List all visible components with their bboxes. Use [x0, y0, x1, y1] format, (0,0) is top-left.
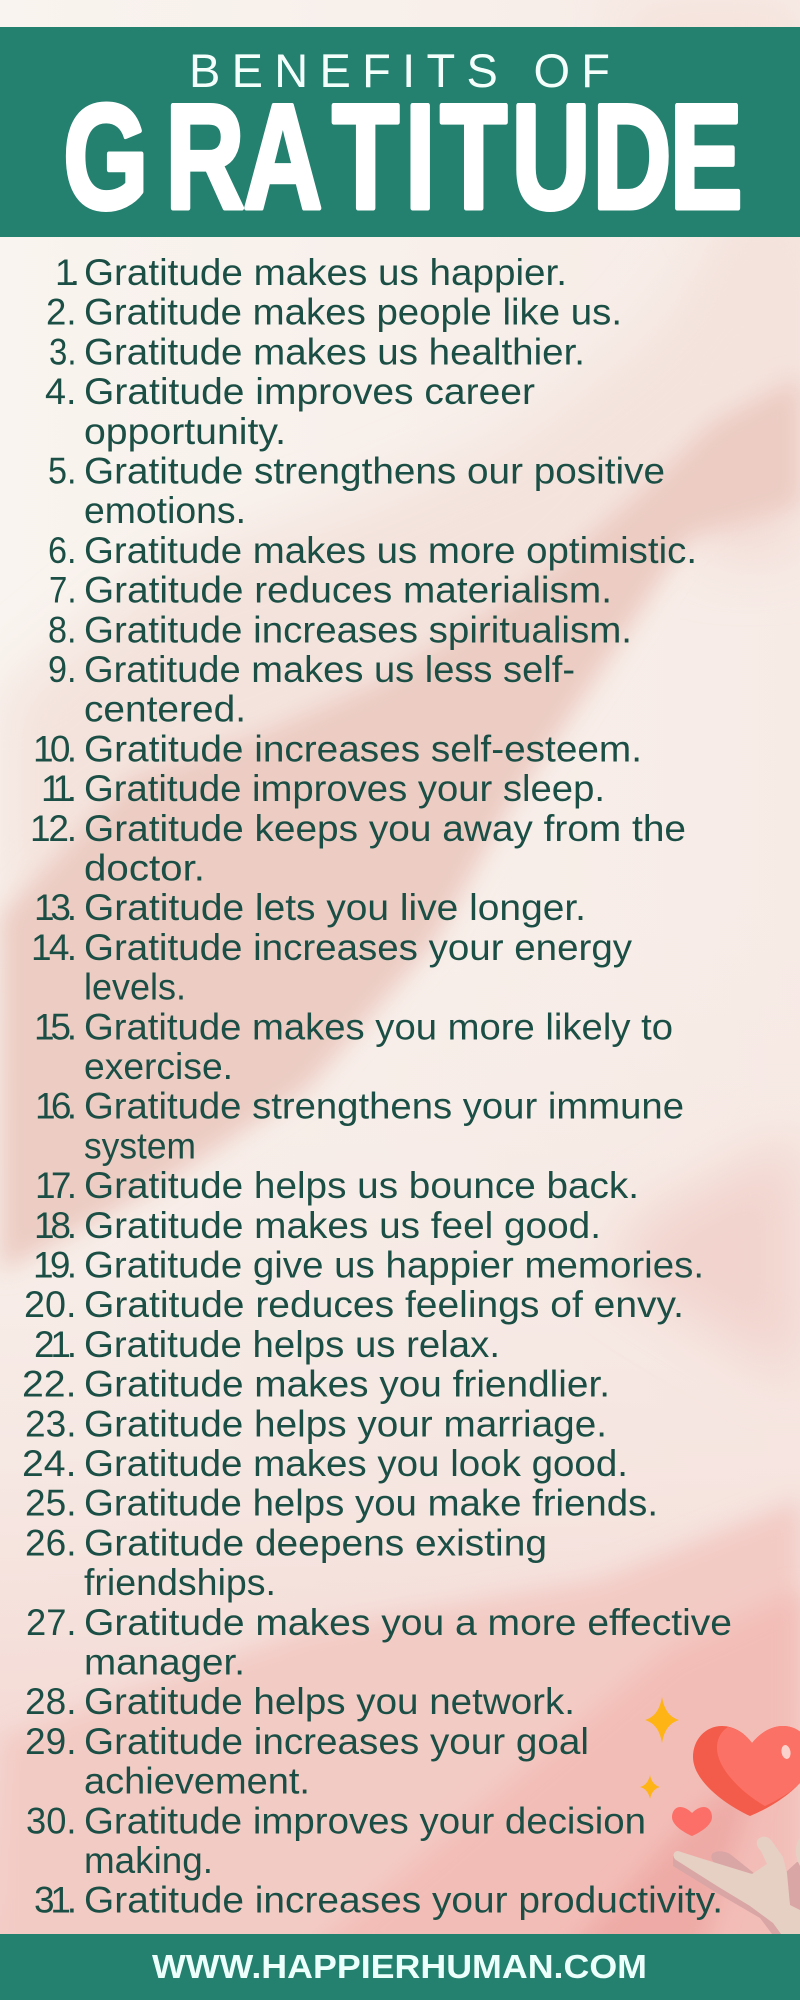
item 19: Gratitude give us happier memories.	[84, 1244, 704, 1286]
item 25: Gratitude helps you make friends.	[84, 1483, 658, 1524]
item 6: 6.	[48, 530, 76, 571]
item 6: Gratitude makes us more optimistic.	[84, 530, 697, 571]
item 26	[25, 1522, 547, 1603]
item 11: Gratitude improves your sleep.	[84, 768, 605, 809]
item 9: Gratitude makes us less self-	[84, 649, 575, 690]
heading: benefits of: BENEFITS OF	[189, 44, 610, 97]
icon: small heart	[672, 1807, 712, 1836]
item 20: Gratitude reduces feelings of envy.	[84, 1284, 684, 1325]
item 5: 5.	[48, 450, 76, 492]
item 27	[26, 1602, 732, 1682]
item 1: 1.	[55, 252, 80, 293]
item 27: manager.	[84, 1642, 245, 1682]
item 16: Gratitude strengthens your immune	[84, 1086, 684, 1127]
item 5: Gratitude strengthens our positive	[84, 450, 665, 492]
item 12: Gratitude keeps you away from the	[84, 808, 686, 849]
item 29	[25, 1721, 589, 1802]
item 3: 3.	[49, 331, 76, 372]
item 23: 23.	[25, 1403, 76, 1444]
item 2: 2.	[46, 292, 76, 333]
item 14: 14.	[31, 927, 77, 968]
footer banner	[0, 1934, 800, 2000]
item 10: Gratitude increases self-esteem.	[84, 728, 642, 769]
item 9	[48, 649, 575, 730]
item 15: 15.	[34, 1006, 77, 1047]
item 4: opportunity.	[84, 411, 286, 452]
item 28: Gratitude helps you network.	[84, 1681, 575, 1722]
item 12: 12.	[30, 808, 77, 849]
item 14: levels.	[84, 967, 186, 1008]
item 9: centered.	[84, 689, 246, 730]
item 7: 7.	[49, 570, 76, 611]
item 29: achievement.	[84, 1761, 310, 1802]
item 16: 16.	[35, 1086, 77, 1127]
item 3: Gratitude makes us healthier.	[84, 331, 585, 372]
item 24: 24.	[22, 1443, 76, 1484]
item 9: 9.	[48, 649, 76, 690]
footer url: WWW.HAPPIERHUMAN.COM	[152, 1948, 647, 1985]
item 30: making.	[84, 1840, 213, 1881]
icon: large heart	[693, 1726, 800, 1816]
item 28: 28.	[25, 1681, 76, 1722]
item 4: 4.	[45, 371, 76, 412]
item 16: system	[84, 1125, 196, 1166]
item 27: Gratitude makes you a more effective	[84, 1602, 732, 1643]
list of 31 benefits	[22, 252, 732, 1921]
item 25: 25.	[25, 1483, 76, 1524]
item 4	[45, 371, 535, 452]
icon: small sparkle	[640, 1775, 660, 1799]
item 18: Gratitude makes us feel good.	[84, 1205, 601, 1246]
item 4: Gratitude improves career	[84, 371, 535, 412]
item 1: Gratitude makes us happier.	[84, 252, 567, 293]
item 30	[26, 1800, 646, 1881]
item 16	[35, 1086, 684, 1166]
item 21: Gratitude helps us relax.	[84, 1324, 500, 1365]
icon: large sparkle	[645, 1697, 679, 1743]
item 15	[34, 1006, 673, 1087]
header banner	[0, 27, 800, 240]
item 8: Gratitude increases spiritualism.	[84, 609, 632, 650]
item 7: Gratitude reduces materialism.	[84, 570, 612, 611]
item 5: emotions.	[84, 490, 246, 531]
item 18: 18.	[34, 1205, 77, 1246]
item 11: 11.	[41, 768, 77, 809]
item 8: 8.	[48, 609, 76, 650]
item 30: 30.	[26, 1800, 76, 1841]
item 2: Gratitude makes people like us.	[84, 292, 622, 333]
item 12	[30, 808, 686, 888]
item 17: Gratitude helps us bounce back.	[84, 1165, 639, 1206]
item 26: Gratitude deepens existing	[84, 1522, 547, 1563]
item 31: Gratitude increases your productivity.	[84, 1880, 723, 1921]
item 26: friendships.	[84, 1562, 276, 1603]
item 17: 17.	[35, 1165, 77, 1206]
icon: hand	[673, 1837, 800, 1934]
item 29: Gratitude increases your goal	[84, 1721, 589, 1762]
item 27: 27.	[26, 1602, 76, 1643]
item 10: 10.	[33, 728, 77, 769]
item 15: exercise.	[84, 1046, 233, 1087]
item 13: Gratitude lets you live longer.	[84, 887, 586, 928]
item 29: 29.	[25, 1721, 76, 1762]
item 22: 22.	[22, 1364, 76, 1405]
item 24: Gratitude makes you look good.	[84, 1443, 628, 1484]
item 31: 31.	[34, 1880, 77, 1921]
item 12: doctor.	[84, 848, 205, 888]
item 21: 21.	[34, 1324, 77, 1365]
item 20: 20.	[24, 1284, 76, 1325]
item 13: 13.	[34, 887, 77, 928]
item 14: Gratitude increases your energy	[84, 927, 633, 968]
item 23: Gratitude helps your marriage.	[84, 1403, 607, 1444]
item 19: 19.	[33, 1244, 77, 1286]
item 15: Gratitude makes you more likely to	[84, 1006, 673, 1047]
item 22: Gratitude makes you friendlier.	[84, 1364, 610, 1405]
illustration: hand with hearts	[640, 1697, 800, 1934]
item 14	[31, 927, 633, 1008]
item 26: 26.	[25, 1522, 76, 1563]
heading: gratitude: GRATITUDE	[63, 74, 743, 240]
item 5	[48, 450, 665, 531]
item 30: Gratitude improves your decision	[84, 1800, 646, 1841]
